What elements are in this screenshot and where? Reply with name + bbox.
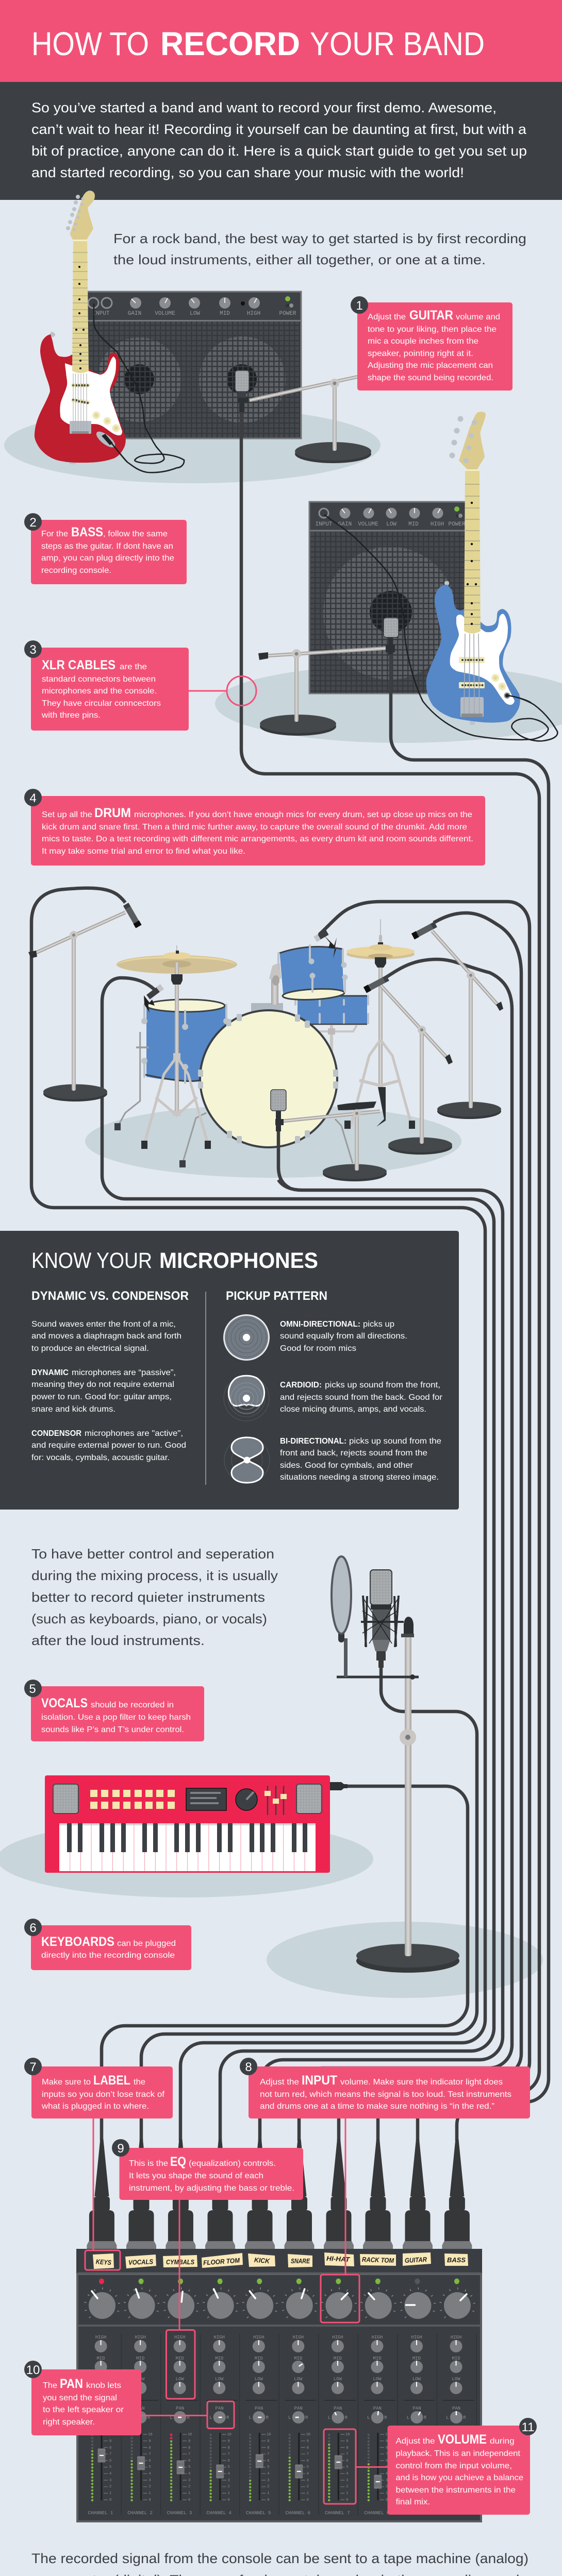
channel 8: L bbox=[367, 2415, 370, 2420]
text: quieter instruments: during the mixing process, it is usually bbox=[31, 1568, 278, 1583]
channel 9: HIGH bbox=[411, 2335, 422, 2340]
callout 3: XLR cables: are the bbox=[120, 663, 147, 671]
channel 9: PAN bbox=[412, 2406, 421, 2411]
callout 8: input: Adjust the bbox=[260, 2078, 299, 2087]
callout 6: keyboards: can be plugged bbox=[117, 1939, 176, 1948]
channel 9 bbox=[401, 2278, 437, 2516]
callout 1: guitar: tone to your liking, then place the bbox=[368, 325, 497, 334]
channel 5: HIGH bbox=[253, 2335, 265, 2340]
column: dynamic vs condensor: and moves a diaphragm back and forth bbox=[31, 1332, 181, 1341]
bass amp: LOW bbox=[386, 521, 396, 528]
vocal mic and stand bbox=[332, 1556, 459, 1973]
floor shadow: bass bbox=[215, 665, 562, 743]
channel 2: R bbox=[147, 2415, 151, 2420]
channel labels: tape: FLOOR TOM bbox=[203, 2257, 240, 2266]
channel 10: LOW bbox=[452, 2377, 460, 2382]
channel 5: CHANNEL 5 bbox=[246, 2511, 271, 2516]
text: quieter instruments: better to record quieter instruments bbox=[31, 1589, 265, 1605]
column: pickup pattern: OMNI-DIRECTIONAL: bbox=[280, 1320, 360, 1329]
channel labels: tape: KEYS bbox=[95, 2258, 112, 2266]
column: pickup pattern: picks up sound from the front, bbox=[325, 1381, 440, 1389]
channel 10: L bbox=[446, 2415, 449, 2420]
microphone cables bbox=[31, 407, 549, 2141]
callout 4: drums bbox=[24, 789, 485, 866]
column: dynamic vs condensor: microphones are "active", bbox=[85, 1429, 183, 1438]
channel 6: PAN bbox=[294, 2406, 303, 2411]
channel 5: LOW bbox=[255, 2377, 263, 2382]
channel 3: 109876543210 bbox=[188, 2433, 192, 2502]
callout 4: drums: kick drum and snare first. Then a third mic further away, to capture the overall sound of the drumkit. Add more bbox=[42, 823, 467, 832]
callout 10: pan: 10 bbox=[26, 2363, 40, 2377]
bass amp: HIGH bbox=[431, 521, 444, 528]
electric guitar bbox=[35, 191, 127, 464]
bass amp: MID bbox=[408, 521, 419, 528]
channel 3 bbox=[164, 2278, 200, 2516]
callout 7: label: what is plugged in to where. bbox=[41, 2102, 149, 2111]
channel 6: LOW bbox=[294, 2377, 303, 2382]
channel 4: HIGH bbox=[213, 2335, 225, 2340]
channel 2: PAN bbox=[136, 2406, 145, 2411]
keyboard bbox=[45, 1775, 348, 1873]
channel 6: CHANNEL 6 bbox=[285, 2511, 310, 2516]
text: analog or digital: The recorded signal from the console can be sent to a tape machine (analog) bbox=[31, 2551, 528, 2566]
channel 10: PAN bbox=[452, 2406, 460, 2411]
channel 10: R bbox=[463, 2415, 466, 2420]
channel 8: CHANNEL 8 bbox=[365, 2511, 389, 2516]
crash cymbal and stand bbox=[117, 945, 237, 1149]
intro panel: and started recording, so you can share your music with the world! bbox=[31, 165, 464, 180]
text: analog or digital bbox=[31, 2551, 536, 2576]
channel 2: LOW bbox=[136, 2377, 145, 2382]
column: pickup pattern: situations needing a strong stereo image. bbox=[280, 1473, 439, 1482]
channel 9: MID bbox=[412, 2356, 421, 2361]
channel 9: L bbox=[407, 2415, 409, 2420]
callout 10: pan: The bbox=[43, 2381, 57, 2390]
callout 11: volume: control from the input volume, bbox=[396, 2462, 512, 2470]
callout 11: volume: between the instruments in the bbox=[396, 2486, 516, 2495]
floor shadow: drums bbox=[85, 1105, 461, 1178]
column: pickup pattern: picks up sound from the bbox=[349, 1437, 441, 1446]
channel 8: HIGH bbox=[372, 2335, 383, 2340]
channel 2 bbox=[125, 2278, 161, 2516]
channel 3: MID bbox=[176, 2356, 184, 2361]
callout 3: XLR cables bbox=[24, 640, 189, 731]
heading: MICROPHONES bbox=[159, 1248, 318, 1273]
channel labels: tape: HI-HAT bbox=[326, 2255, 351, 2263]
mic on rack tom bbox=[313, 929, 337, 958]
callout 10: pan: you send the signal bbox=[43, 2394, 117, 2402]
callout 8: input bbox=[240, 2058, 530, 2119]
callout 2: bass: steps as the guitar. If dont have an bbox=[41, 542, 173, 551]
drum kit bbox=[28, 903, 503, 1188]
guitar amp bbox=[87, 292, 301, 438]
column: dynamic vs condensor: meaning they do not require external bbox=[31, 1380, 174, 1389]
callout 3: XLR cables: XLR CABLES bbox=[42, 658, 115, 672]
channel 1: R bbox=[108, 2415, 111, 2420]
mic on floor tom bbox=[144, 984, 164, 1012]
intro panel: bit of practice, anyone can do it. Here is a quick start guide to get you set up bbox=[31, 143, 527, 159]
callout 3: XLR cables: with three pins. bbox=[41, 711, 101, 720]
channel 7: L bbox=[328, 2415, 330, 2420]
bass cable bbox=[324, 515, 557, 741]
channel 3: HIGH bbox=[174, 2335, 186, 2340]
callout 1: guitar: volume and bbox=[456, 313, 500, 321]
channel 3: L bbox=[170, 2415, 173, 2420]
column: dynamic vs condensor: microphones are “passive”, bbox=[72, 1368, 176, 1377]
mic stand: bass amp bbox=[258, 618, 399, 736]
guitar cable bbox=[94, 303, 184, 472]
callout 5: vocals: sounds like P’s and T’s under control. bbox=[41, 1725, 184, 1734]
callout 11: volume: and is how you achieve a balance bbox=[396, 2473, 523, 2482]
callout 10: pan: PAN bbox=[60, 2377, 83, 2391]
title banner bbox=[0, 0, 562, 82]
title banner: RECORD bbox=[160, 25, 300, 62]
callout 2: bass: 2 bbox=[29, 516, 37, 530]
channel 7: 109876543210 bbox=[345, 2433, 350, 2502]
callout 11: volume bbox=[388, 2418, 537, 2515]
channel 2: MID bbox=[136, 2356, 144, 2361]
callout 11: volume: Adjust the bbox=[396, 2437, 435, 2446]
channel 1: HIGH bbox=[95, 2335, 106, 2340]
callout 4: drums: It may take some trial and error to find what you like. bbox=[42, 847, 245, 856]
channel 6: HIGH bbox=[293, 2335, 304, 2340]
callout 11: volume: VOLUME bbox=[438, 2432, 487, 2447]
callout 3: XLR cables: 3 bbox=[29, 643, 37, 657]
channel 4: MID bbox=[215, 2356, 223, 2361]
callout 1: guitar: shape the sound being recorded. bbox=[368, 374, 493, 382]
text: quieter instruments: after the loud instruments. bbox=[31, 1633, 205, 1648]
callout 8: input: and drums one at a time to make sure nothing is “in the red.” bbox=[260, 2102, 494, 2111]
guitar amp: HIGH bbox=[247, 311, 260, 317]
callout 7: label: 7 bbox=[29, 2060, 37, 2074]
text: loud instruments: For a rock band, the best way to get started is by first recording bbox=[113, 231, 526, 246]
callout 5: vocals bbox=[24, 1680, 204, 1741]
channel 7 bbox=[322, 2278, 358, 2516]
callout 8: input: 8 bbox=[245, 2060, 252, 2074]
callout 7: label: inputs so you don’t lose track of bbox=[42, 2090, 165, 2099]
column: pickup pattern bbox=[226, 1289, 443, 1482]
column: dynamic vs condensor: snare and kick drums. bbox=[31, 1405, 115, 1414]
callout 3: XLR cables: microphones and the console. bbox=[42, 687, 157, 696]
column: pickup pattern: CARDIOID: bbox=[280, 1381, 322, 1389]
channel 8: PAN bbox=[373, 2406, 382, 2411]
floor tom bbox=[114, 999, 229, 1130]
callout 1: guitar: Adjusting the mic placement can bbox=[368, 361, 493, 370]
column: dynamic vs condensor: CONDENSOR bbox=[31, 1429, 81, 1438]
floor shadow: guitar bbox=[4, 407, 381, 483]
channel labels: tape bbox=[93, 2252, 468, 2269]
text: loud instruments bbox=[113, 231, 526, 267]
callout 11: volume: during bbox=[490, 2437, 515, 2446]
callout 9: EQ: This is the bbox=[129, 2159, 168, 2168]
callout 5: vocals: should be recorded in bbox=[91, 1701, 174, 1709]
channel 7: MID bbox=[334, 2356, 342, 2361]
rack toms bbox=[278, 945, 368, 1024]
callout 4: drums: DRUM bbox=[94, 806, 131, 820]
highlight frames and leader lines bbox=[85, 2119, 388, 2504]
channel 2: CHANNEL 2 bbox=[127, 2511, 153, 2516]
callout 2: bass: For the bbox=[41, 530, 68, 538]
guitar amp: VOLUME bbox=[155, 311, 175, 317]
intro panel: So you’ve started a band and want to record your first demo. Awesome, bbox=[31, 100, 497, 115]
bass amp: POWER bbox=[448, 521, 466, 528]
callout 2: bass bbox=[24, 513, 187, 584]
column: dynamic vs condensor: and require external power to run. Good bbox=[31, 1441, 186, 1450]
callout 9: EQ: (equalization) controls. bbox=[189, 2159, 276, 2168]
callout 1: guitar: mic a couple inches from the bbox=[368, 337, 478, 346]
callout 10: pan: knob lets bbox=[86, 2381, 121, 2390]
channel labels: tape: VOCALS bbox=[128, 2258, 154, 2266]
channel 4 bbox=[204, 2278, 240, 2516]
column: pickup pattern: PICKUP PATTERN bbox=[226, 1289, 327, 1303]
channel 4: R bbox=[226, 2415, 229, 2420]
column: pickup pattern: picks up bbox=[363, 1320, 394, 1329]
bass amp bbox=[309, 502, 467, 693]
callout 9: EQ: instrument, by adjusting the bass or treble. bbox=[129, 2184, 294, 2193]
tom mount bbox=[251, 963, 360, 1054]
callout 2: bass: recording console. bbox=[41, 566, 111, 575]
callout 8: input: INPUT bbox=[302, 2073, 337, 2088]
column: pickup pattern: front and back, rejects sound from the bbox=[280, 1449, 427, 1458]
callout 3: XLR cables: standard connectors between bbox=[42, 675, 156, 684]
channel 8: LOW bbox=[373, 2377, 382, 2382]
text: quieter instruments: (such as keyboards, piano, or vocals) bbox=[31, 1611, 267, 1626]
bass amp: INPUT bbox=[315, 521, 333, 528]
channel 4: L bbox=[209, 2415, 212, 2420]
callout 4: drums: Set up all the bbox=[42, 810, 92, 819]
channel labels: tape: KICK bbox=[254, 2256, 271, 2265]
channel 7: R bbox=[345, 2415, 348, 2420]
channel 5: PAN bbox=[255, 2406, 263, 2411]
channel 1: PAN bbox=[97, 2406, 105, 2411]
overhead stand: right rear bbox=[411, 922, 503, 1119]
channel 4: CHANNEL 4 bbox=[206, 2511, 232, 2516]
channel labels: tape: GUITAR bbox=[405, 2256, 427, 2264]
callout 4: drums: microphones. If you don’t have enough mics for every drum, set up close up mics on the bbox=[134, 810, 472, 819]
channel 7: LOW bbox=[334, 2377, 342, 2382]
channel 3: PAN bbox=[176, 2406, 184, 2411]
floor shadow: keyboard bbox=[0, 1820, 373, 1897]
channel 4: 109876543210 bbox=[227, 2433, 232, 2502]
channel 10 bbox=[440, 2278, 476, 2516]
guitar amp: MID bbox=[220, 311, 230, 317]
channel labels: tape: RACK TOM bbox=[362, 2256, 394, 2264]
column: pickup pattern: close micing drums, amps, and vocals. bbox=[280, 1405, 426, 1414]
channel 1: L bbox=[91, 2415, 94, 2420]
kick mic and stand bbox=[271, 1090, 387, 1188]
callout 4: drums: 4 bbox=[29, 791, 37, 805]
channel 2: L bbox=[130, 2415, 133, 2420]
callout 6: keyboards: KEYBOARDS bbox=[41, 1935, 114, 1949]
channel 1 bbox=[85, 2278, 121, 2516]
guitar amp: GAIN bbox=[128, 311, 141, 317]
channel 1: MID bbox=[96, 2356, 105, 2361]
floor shadow: vocal stand bbox=[267, 1922, 543, 1998]
intro panel: can’t wait to hear it! Recording it yourself can be daunting at first, but with a bbox=[31, 122, 527, 137]
mixing console bbox=[76, 2249, 482, 2522]
channel 8: R bbox=[384, 2415, 387, 2420]
heading: KNOW YOUR bbox=[31, 1248, 152, 1273]
title banner: YOUR BAND bbox=[310, 25, 485, 62]
callout 6: keyboards: directly into the recording console bbox=[41, 1951, 175, 1960]
callout 10: pan: to the left speaker or bbox=[43, 2405, 124, 2414]
bass guitar bbox=[426, 412, 531, 725]
heading bbox=[31, 1248, 318, 1273]
column: pickup pattern: Good for room mics bbox=[280, 1344, 356, 1353]
channel 8: 109876543210 bbox=[385, 2433, 389, 2502]
icon: cardioid bbox=[224, 1376, 269, 1421]
intro panel bbox=[0, 82, 562, 200]
channel 5: L bbox=[249, 2415, 252, 2420]
callout 9: EQ: 9 bbox=[117, 2142, 124, 2156]
text: loud instruments: the loud instruments, either all together, or one at a time. bbox=[113, 252, 486, 267]
channel 9: LOW bbox=[412, 2377, 421, 2382]
channel 3: R bbox=[187, 2415, 190, 2420]
channel labels: tape: SNARE bbox=[291, 2257, 310, 2265]
callout 11: volume: 11 bbox=[522, 2420, 534, 2434]
channel labels: tape: CYMBALS bbox=[166, 2258, 194, 2266]
kick drum bbox=[179, 1010, 353, 1167]
panel: know your microphones bbox=[0, 1231, 459, 1510]
channel 10: MID bbox=[452, 2356, 460, 2361]
column: dynamic vs condensor: for: vocals, cymbals, acoustic guitar. bbox=[31, 1453, 170, 1462]
hi-hat bbox=[337, 919, 415, 1129]
callout 1: guitar: GUITAR bbox=[409, 308, 453, 323]
callout 11: volume: final mix. bbox=[396, 2498, 430, 2506]
icon: omni-directional bbox=[223, 1314, 270, 1361]
channel 10: HIGH bbox=[451, 2335, 461, 2340]
mic stand: guitar amp bbox=[235, 370, 371, 463]
text: quieter instruments: To have better control and seperation bbox=[31, 1546, 274, 1562]
callout 9: EQ: EQ bbox=[170, 2155, 186, 2169]
callout 11: volume: playback. This is an independent bbox=[396, 2449, 521, 2458]
callout 2: bass: , follow the same bbox=[103, 530, 168, 538]
channel 6: MID bbox=[294, 2356, 302, 2361]
channel 5: MID bbox=[255, 2356, 263, 2361]
channel 1: CHANNEL 1 bbox=[88, 2511, 113, 2516]
callout 2: bass: amp, you can plug directly into the bbox=[41, 554, 174, 563]
channel 1: LOW bbox=[96, 2377, 105, 2382]
column: pickup pattern: sides. Good for cymbals, and other bbox=[280, 1461, 414, 1470]
column: dynamic vs condensor bbox=[31, 1289, 189, 1462]
guitar amp: POWER bbox=[279, 311, 296, 317]
channel 6: L bbox=[288, 2415, 291, 2420]
guitar amp: LOW bbox=[190, 311, 200, 317]
callout 7: label: Make sure to bbox=[42, 2078, 91, 2087]
channel 8 bbox=[361, 2278, 398, 2516]
overhead stand: right front bbox=[363, 975, 453, 1155]
callout 8: input: not turn red, which means the signal is too loud. Test instruments bbox=[260, 2090, 511, 2099]
callout 7: label: the bbox=[134, 2078, 145, 2087]
channel 5: 109876543210 bbox=[267, 2433, 271, 2502]
text: quieter instruments bbox=[31, 1546, 278, 1648]
channel 4: LOW bbox=[215, 2377, 224, 2382]
channel 9: CHANNEL 9 bbox=[404, 2511, 429, 2516]
column: pickup pattern: and rejects sound from the back. Good for bbox=[280, 1393, 443, 1402]
callout 5: vocals: isolation. Use a pop filter to keep harsh bbox=[41, 1713, 191, 1722]
channel labels: tape: BASS bbox=[447, 2256, 466, 2264]
channel 1: 109876543210 bbox=[109, 2433, 113, 2502]
channel 8: MID bbox=[373, 2356, 382, 2361]
icon: bi-directional bbox=[224, 1437, 270, 1483]
column: pickup pattern: BI-DIRECTIONAL: bbox=[280, 1437, 346, 1446]
column: dynamic vs condensor: to produce an electrical signal. bbox=[31, 1344, 149, 1353]
cable plugs bbox=[87, 2139, 472, 2249]
overhead stand: left bbox=[28, 903, 142, 1101]
callout 4: drums: mics to taste. Do a test recording with different mic arrangements, as every drum kit and room sounds different. bbox=[42, 835, 473, 843]
column: dynamic vs condensor: DYNAMIC bbox=[31, 1368, 69, 1377]
callout 2: bass: BASS bbox=[71, 525, 103, 539]
column: dynamic vs condensor: Sound waves enter the front of a mic, bbox=[31, 1320, 176, 1329]
channel 5 bbox=[243, 2278, 279, 2516]
column: pickup pattern: sound equally from all directions. bbox=[280, 1332, 407, 1341]
channel 7: CHANNEL 7 bbox=[325, 2511, 350, 2516]
bass amp: VOLUME bbox=[358, 521, 378, 528]
callout 9: EQ: It lets you shape the sound of each bbox=[129, 2172, 263, 2180]
channel 10: CHANNEL 10 bbox=[442, 2511, 470, 2516]
bass amp: GAIN bbox=[338, 521, 352, 528]
title banner: HOW TO bbox=[31, 25, 149, 62]
guitar amp: INPUT bbox=[92, 311, 110, 317]
callout 1: guitar: 1 bbox=[356, 299, 363, 313]
channel 6 bbox=[283, 2278, 319, 2516]
callout 6: keyboards: 6 bbox=[29, 1921, 37, 1935]
callout 10: pan bbox=[24, 2361, 141, 2435]
channel 6: 109876543210 bbox=[306, 2433, 310, 2502]
channel 2: 109876543210 bbox=[148, 2433, 153, 2502]
channel 6: R bbox=[305, 2415, 308, 2420]
callout 7: label: LABEL bbox=[93, 2073, 130, 2088]
callout 1: guitar: Adjust the bbox=[368, 313, 406, 321]
callout 1: guitar: speaker, pointing right at it. bbox=[368, 349, 473, 358]
callout 1: guitar bbox=[351, 296, 513, 391]
callout 10: pan: right speaker. bbox=[43, 2418, 95, 2427]
column: dynamic vs condensor: power to run. Good for: guitar amps, bbox=[31, 1393, 172, 1401]
callout 3: XLR cables: They have circular conncectors bbox=[42, 699, 161, 708]
channel 3: LOW bbox=[176, 2377, 184, 2382]
callout 5: vocals: 5 bbox=[29, 1682, 36, 1696]
callout 9: EQ bbox=[112, 2139, 303, 2200]
channel 9: R bbox=[424, 2415, 427, 2420]
column: dynamic vs condensor: DYNAMIC VS. CONDENSOR bbox=[31, 1289, 189, 1303]
callout 6: keyboards bbox=[24, 1919, 191, 1970]
channel 5: R bbox=[266, 2415, 269, 2420]
callout 8: input: volume. Make sure the indicator light does bbox=[340, 2078, 503, 2087]
channel 4: PAN bbox=[216, 2406, 224, 2411]
callout line: XLR bbox=[189, 676, 256, 706]
callout 5: vocals: VOCALS bbox=[41, 1696, 88, 1710]
callout 7: label bbox=[24, 2058, 173, 2119]
channel 2: HIGH bbox=[135, 2335, 146, 2340]
channel 3: CHANNEL 3 bbox=[167, 2511, 192, 2516]
channel 7: HIGH bbox=[332, 2335, 343, 2340]
channel 7: PAN bbox=[334, 2406, 342, 2411]
